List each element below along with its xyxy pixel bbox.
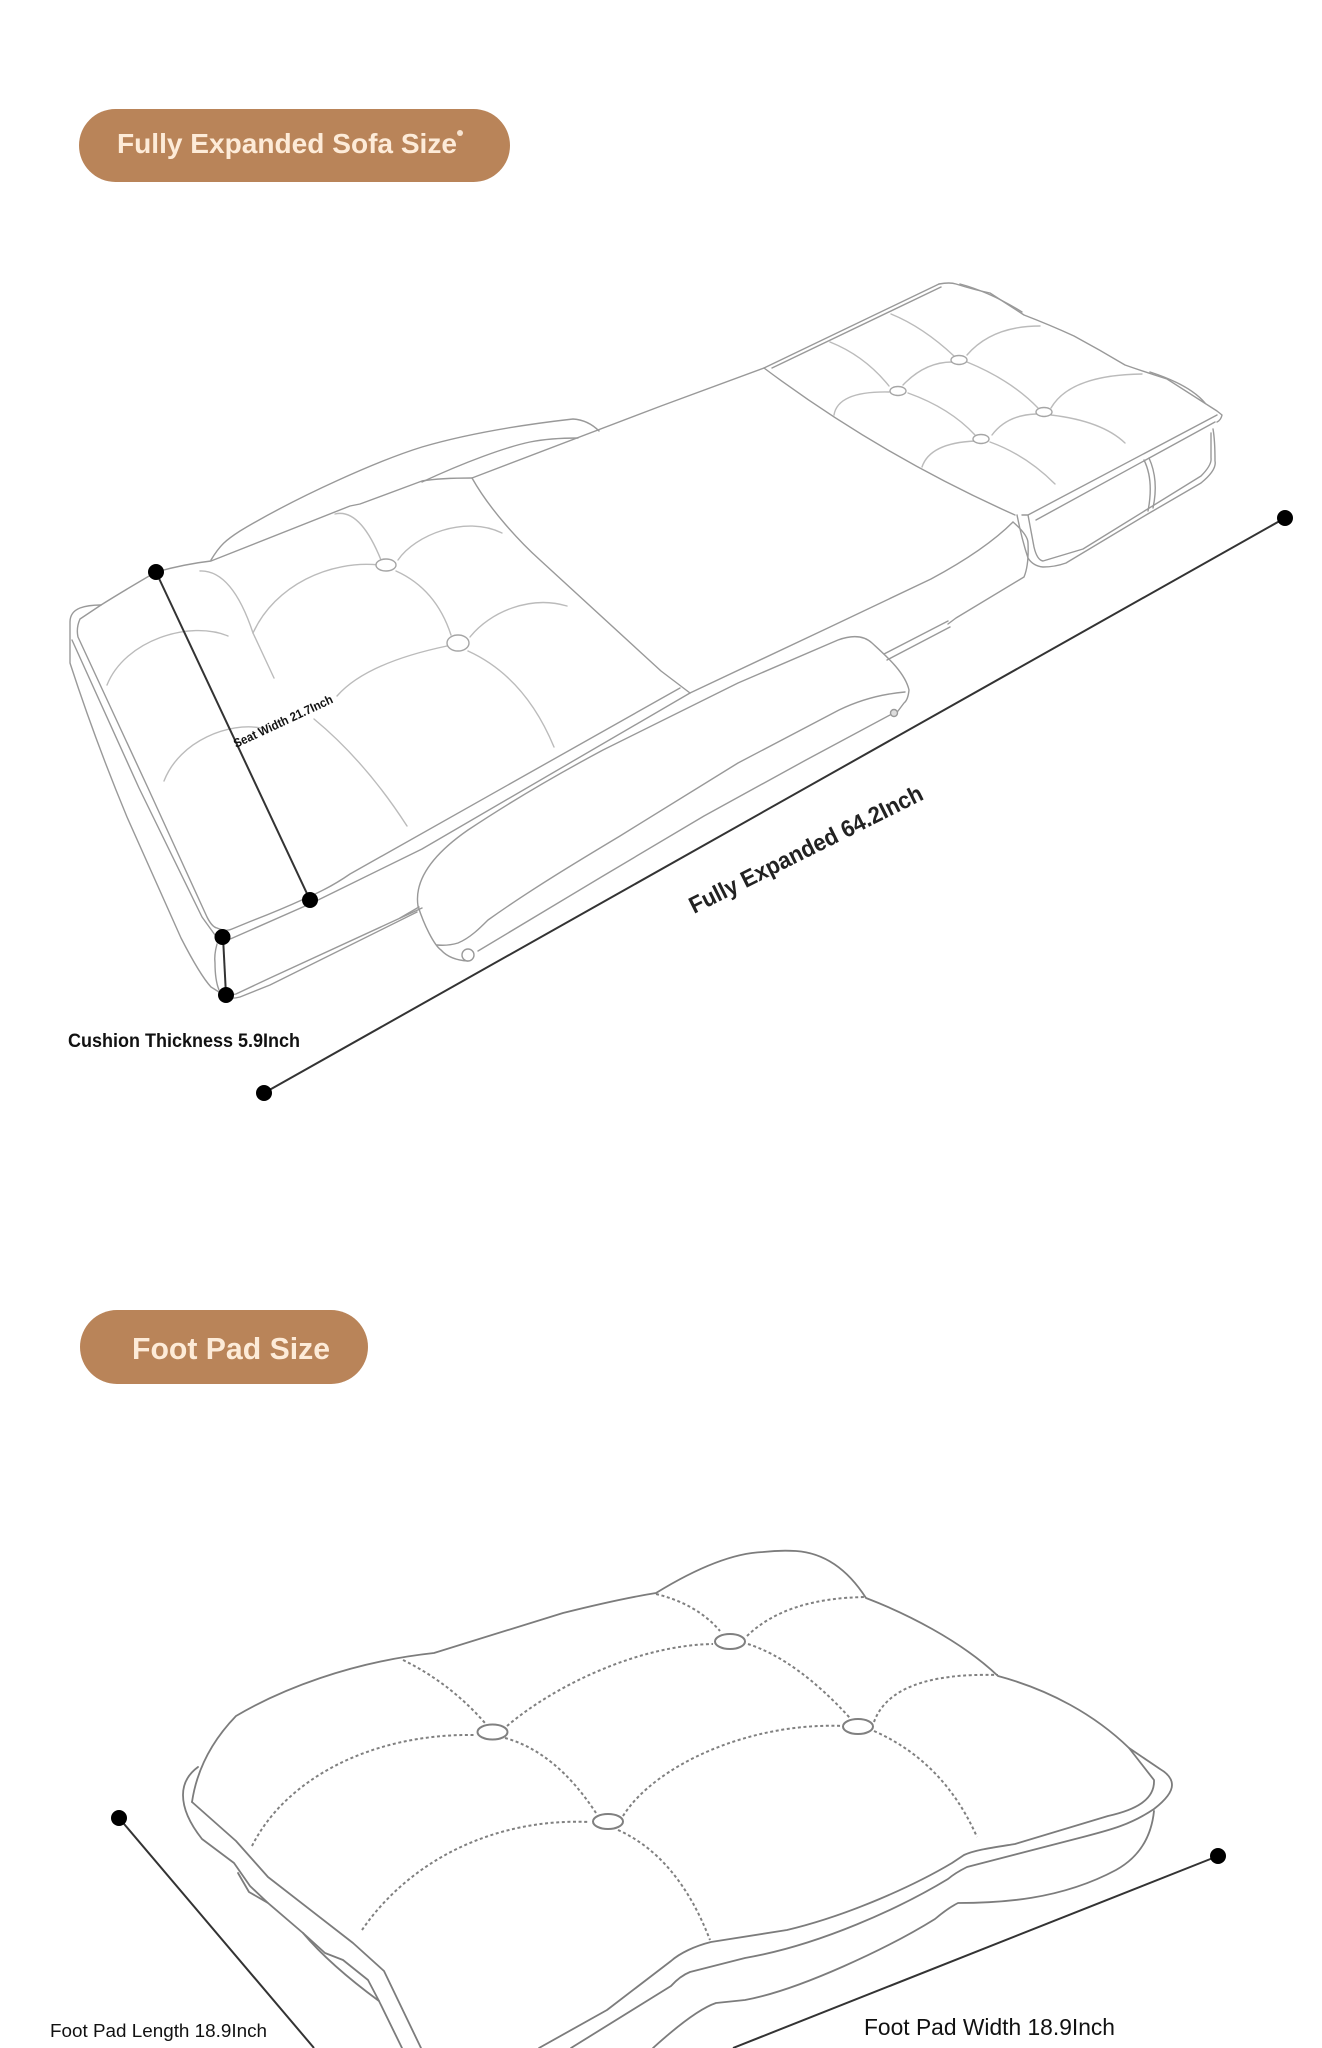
foot pad: outlines: [183, 1551, 1172, 2048]
dimension: cushion thickness: [68, 929, 300, 1052]
sofa: back armrest: [211, 419, 599, 560]
dimension: foot pad length: [50, 1810, 314, 2048]
dimension: seat width: [148, 564, 335, 908]
dimension: seat width: Seat Width 21.7Inch: [231, 692, 335, 751]
foot pad line drawing: [183, 1551, 1172, 2048]
dimension: cushion thickness: Cushion Thickness 5.9Inch: [68, 1030, 300, 1052]
dimension: foot pad length: Foot Pad Length 18.9Inch: [50, 2020, 267, 2041]
heading pill: Fully Expanded Sofa Size: [79, 109, 510, 182]
foot pad: tuft buttons: [478, 1634, 873, 1829]
sofa: foot section tufting: [830, 314, 1142, 484]
sofa: seat cushion outline: [70, 368, 764, 998]
heading pill: Foot Pad Size: Foot Pad Size: [132, 1331, 330, 1366]
sofa line drawing: [70, 283, 1222, 998]
heading pill: Fully Expanded Sofa Size: Fully Expanded Sofa Size: [117, 128, 457, 159]
sofa: front armrest: [400, 637, 909, 961]
heading pill: Foot Pad Size: [80, 1310, 368, 1384]
foot pad: dotted stitching: [252, 1594, 998, 1940]
dimension: fully expanded length: Fully Expanded 64.2Inch: [685, 780, 927, 918]
dimension: foot pad width: [733, 1848, 1226, 2048]
sofa: middle panel and foot section outline: [690, 283, 1222, 693]
sofa: seat tufting: [107, 513, 567, 826]
dimension: foot pad width: Foot Pad Width 18.9Inch: [864, 2014, 1115, 2040]
dimension: fully expanded length: [256, 510, 1293, 1101]
